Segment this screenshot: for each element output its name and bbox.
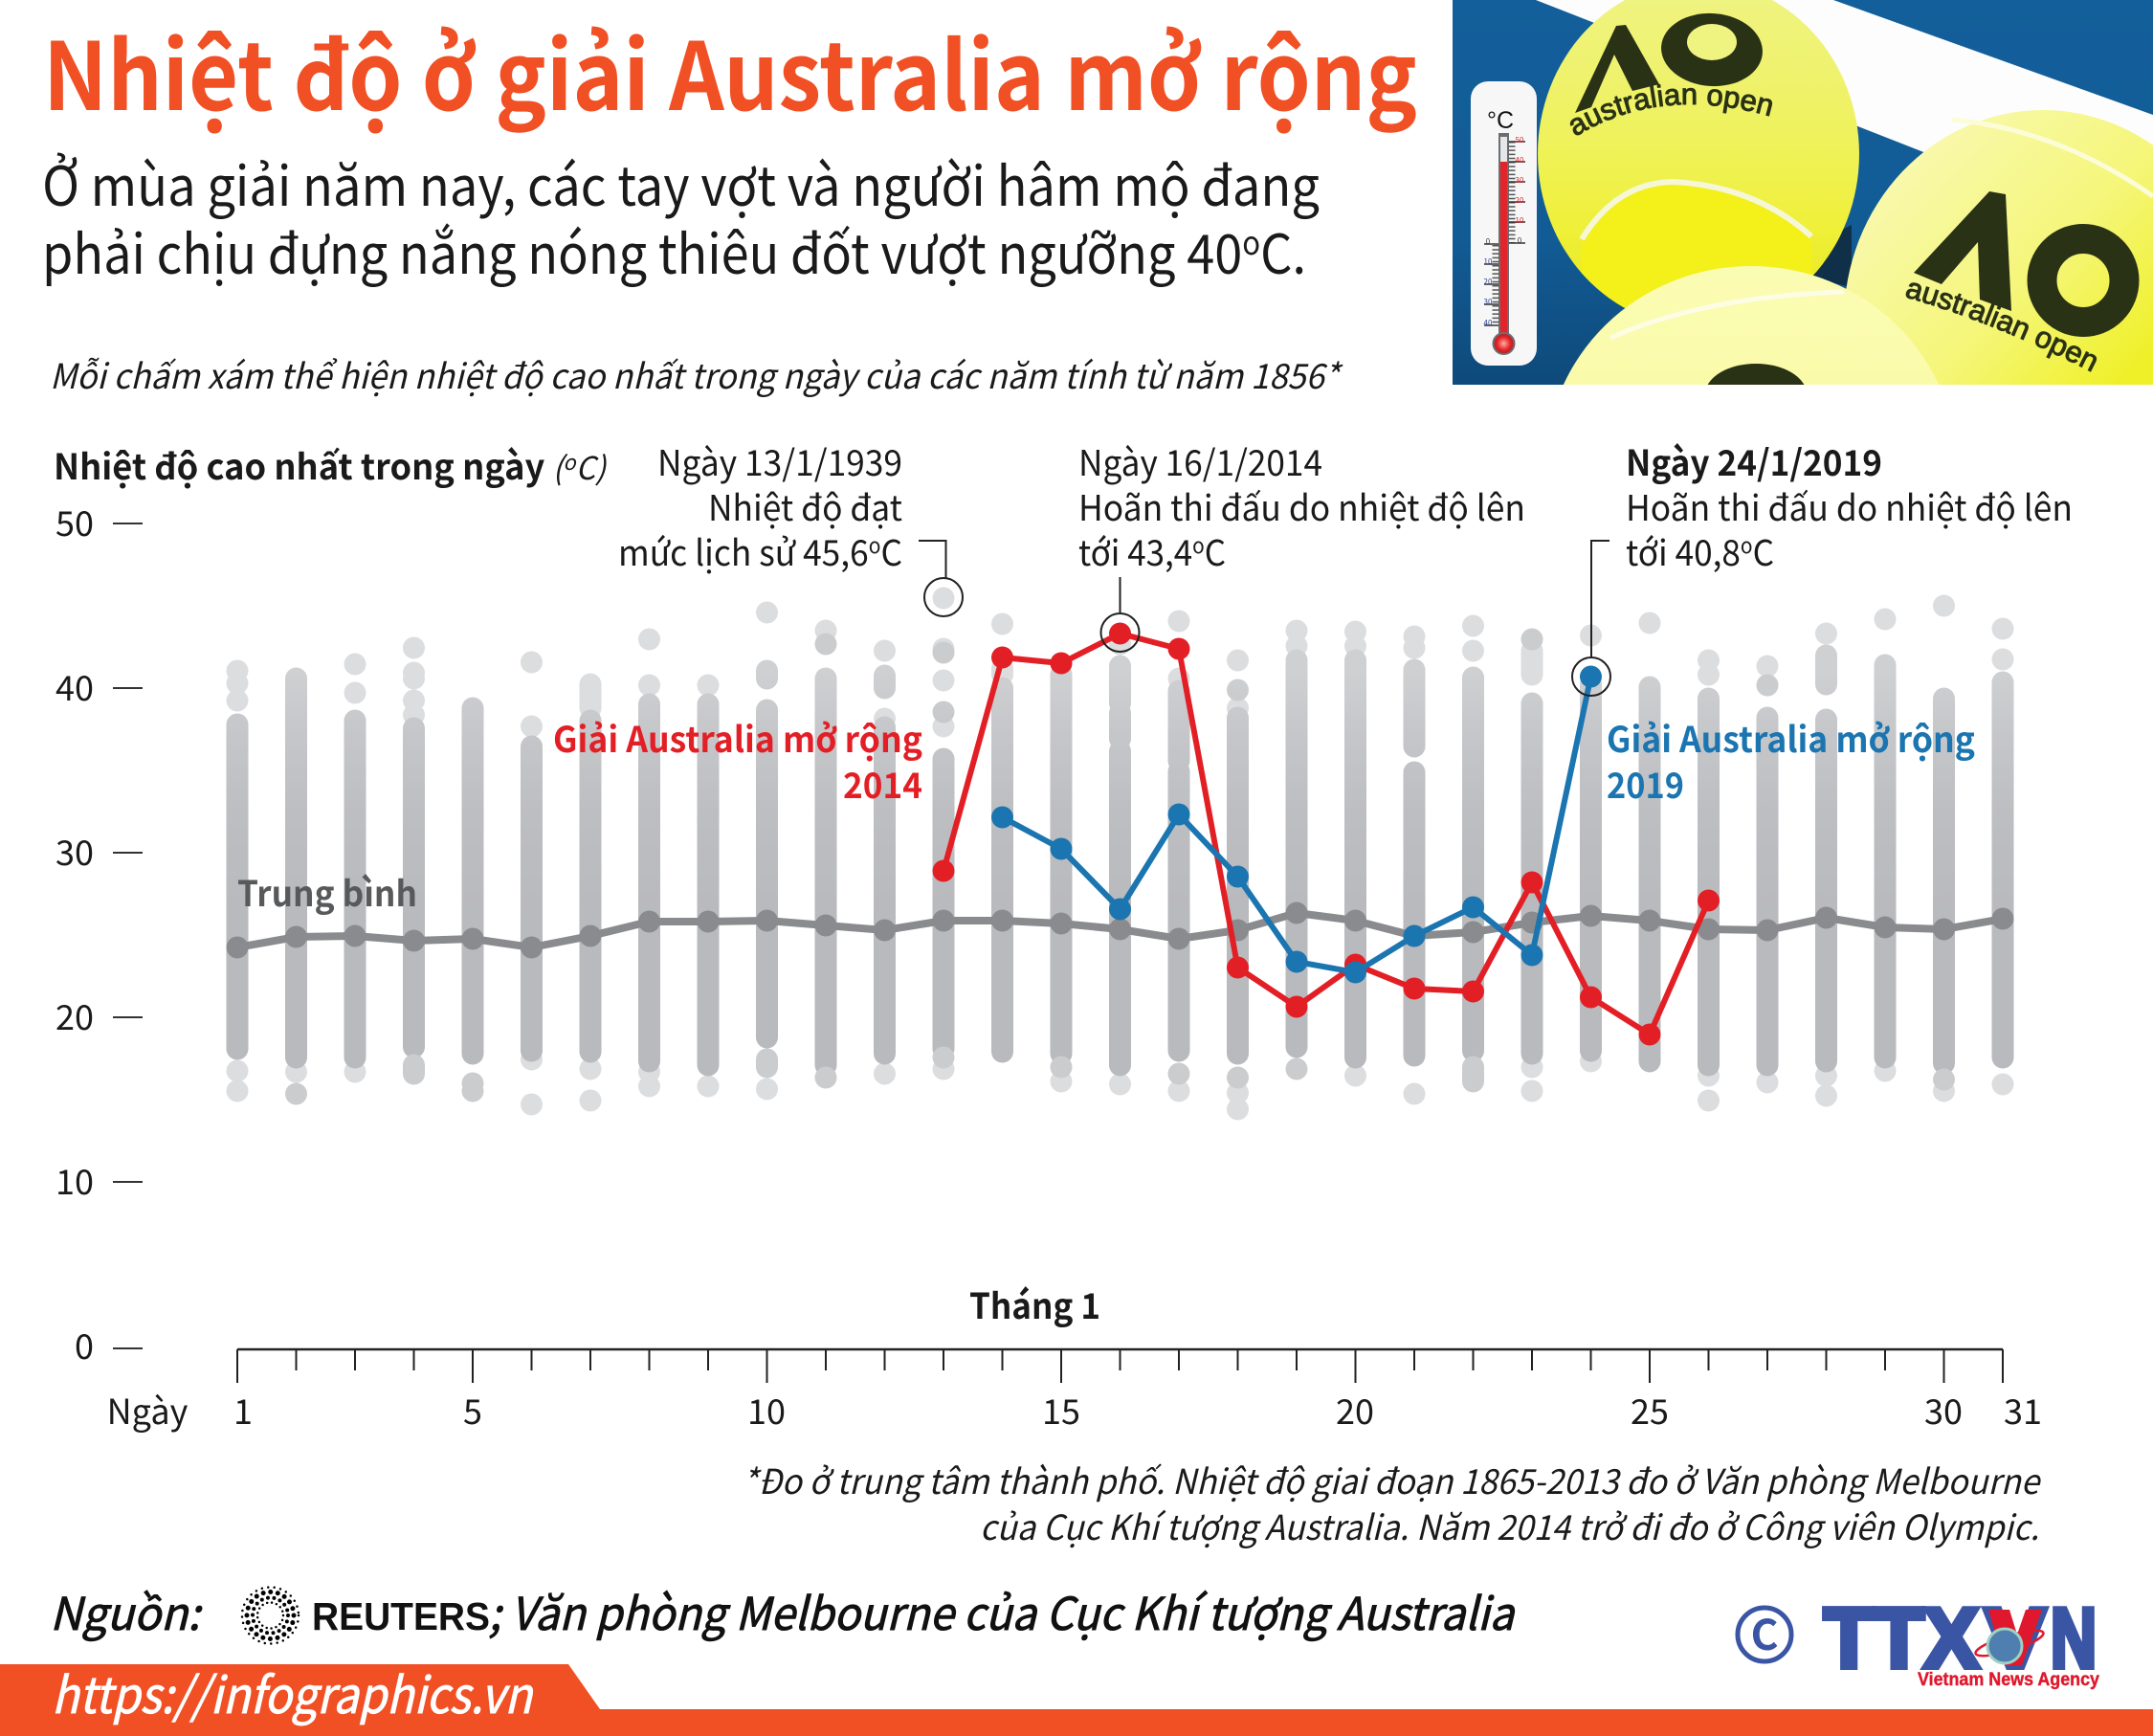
callout: 24/1/2019: tới 40,8 — [1626, 524, 1746, 576]
callout: 16/1/2014: o — [1192, 529, 1205, 560]
source line — [50, 1577, 1516, 1644]
callout: 16/1/2014 — [1078, 434, 1525, 652]
callout: 13/1/1939: mức lịch sử 45,6 — [618, 524, 880, 576]
callout: 16/1/2014: Hoãn thi đấu do nhiệt độ lên — [1078, 479, 1525, 531]
y axis labels and ticks: 10 — [55, 1155, 94, 1205]
icon: thermometer: 50 — [1516, 135, 1524, 145]
y axis labels and ticks: 30 — [55, 826, 94, 876]
y axis labels and ticks: 50 — [55, 497, 94, 546]
icon: thermometer: 10 — [1484, 256, 1493, 267]
logo on ball 2 — [1906, 191, 2140, 372]
copyright mark: C — [1751, 1601, 1778, 1662]
TTXVN logo: Vietnam News Agency — [1918, 1670, 2099, 1690]
website url: https://infographics.vn — [52, 1656, 534, 1727]
callout: 24/1/2019: Hoãn thi đấu do nhiệt độ lên — [1626, 479, 2073, 531]
x axis: Ngày — [107, 1385, 189, 1435]
x axis: 15 — [1042, 1385, 1080, 1435]
note: meaning of grey dots: Mỗi chấm xám thể hiện nhiệt độ cao nhất trong ngày của các năm tính từ năm 1856* — [50, 349, 1343, 399]
icon: thermometer: 30 — [1484, 297, 1493, 307]
x axis: 25 — [1631, 1385, 1669, 1435]
x axis — [107, 1349, 2042, 1435]
TTXVN logo — [1824, 1591, 2099, 1690]
label: 2019 series: 2019 — [1607, 757, 1684, 809]
footnote: *Đo ở trung tâm thành phố. Nhiệt độ giai đoạn 1865-2013 đo ở Văn phòng Melbourne — [743, 1455, 2042, 1504]
average line — [237, 913, 2003, 947]
icon: thermometer: 20 — [1516, 195, 1524, 206]
label: 2019 series — [1607, 711, 1975, 809]
icon: thermometer: 40 — [1484, 318, 1493, 328]
TTXVN logo: TTX — [1824, 1591, 1979, 1685]
x axis: 1 — [233, 1385, 253, 1435]
icon: thermometer: 30 — [1516, 175, 1524, 186]
callout: 16/1/2014: Ngày 16/1/2014 — [1078, 434, 1322, 486]
logo on ball 1 — [1569, 13, 1772, 136]
logo on ball 1: australian open — [1569, 84, 1772, 136]
icon: thermometer: °C — [1487, 107, 1514, 134]
icon: thermometer: 10 — [1516, 215, 1524, 226]
red line: 2014 tournament — [943, 634, 1709, 1035]
subtitle: C. — [1260, 211, 1306, 290]
callout: 13/1/1939: o — [869, 529, 880, 560]
dot columns: daily highs since 1856 — [237, 598, 2003, 1109]
TTXVN logo: N — [2051, 1591, 2097, 1685]
source line: REUTERS — [312, 1594, 490, 1638]
icon: thermometer: 40 — [1516, 155, 1524, 166]
callout: 13/1/1939: Nhiệt độ đạt — [708, 479, 902, 531]
logo on ball 2: australian open — [1906, 282, 2098, 372]
subtitle: Ở mùa giải năm nay, các tay vợt và người hâm mộ đang — [42, 144, 1320, 222]
callout: 16/1/2014: C — [1205, 524, 1226, 576]
footnote: của Cục Khí tượng Australia. Năm 2014 trở đi đo ở Công viên Olympic. — [980, 1501, 2039, 1550]
callout: 24/1/2019: C — [1753, 524, 1774, 576]
callout: 13/1/1939: C — [880, 524, 902, 576]
blue line: 2019 tournament — [1003, 677, 1590, 972]
label: 2014 series: 2014 — [843, 757, 922, 809]
icon: thermometer: 0 — [1486, 236, 1491, 247]
x axis: 20 — [1336, 1385, 1374, 1435]
y axis labels and ticks: 0 — [75, 1320, 94, 1369]
callout: 13/1/1939: Ngày 13/1/1939 — [657, 434, 902, 486]
photo: Australian Open tennis balls with thermometer — [1453, 0, 2153, 385]
y axis labels and ticks: 20 — [55, 990, 94, 1040]
label: 2019 series: Giải Australia mở rộng — [1607, 711, 1975, 763]
label: 2014 series: Giải Australia mở rộng — [553, 711, 922, 763]
TTXVN logo: V — [1985, 1591, 2046, 1685]
subtitle: phải chịu đựng nắng nóng thiêu đốt vượt ngưỡng 40 — [42, 211, 1351, 290]
title: Nhiệt độ ở giải Australia mở rộng — [43, 2, 1417, 138]
icon: thermometer: 0 — [1518, 235, 1522, 246]
callout: 24/1/2019: Ngày 24/1/2019 — [1626, 434, 1882, 486]
source line: Nguồn: — [50, 1577, 203, 1643]
x axis: 5 — [463, 1385, 482, 1435]
label: 2014 series — [553, 711, 922, 809]
callout: 24/1/2019: o — [1741, 529, 1753, 560]
copyright mark — [1738, 1601, 1791, 1662]
icon: thermometer — [1471, 81, 1537, 366]
x axis: 31 — [2004, 1385, 2042, 1435]
subtitle: o — [1242, 217, 1260, 264]
x axis month label: Tháng 1 — [969, 1278, 1100, 1329]
x axis: 30 — [1924, 1385, 1963, 1435]
footnote — [743, 1455, 2042, 1550]
callout: 24/1/2019 — [1572, 434, 2073, 696]
y axis title: Nhiệt độ cao nhất trong ngày ( — [54, 438, 564, 490]
icon: thermometer: 20 — [1484, 277, 1493, 287]
y axis title: C) — [575, 443, 608, 489]
x axis: 10 — [747, 1385, 786, 1435]
footer band — [0, 1664, 2153, 1736]
callout: 16/1/2014: tới 43,4 — [1078, 524, 1199, 576]
y axis title: o — [563, 446, 577, 477]
subtitle — [42, 144, 1320, 290]
y axis labels and ticks — [55, 497, 143, 1369]
icon: Reuters dot logo — [242, 1587, 299, 1644]
y axis labels and ticks: 40 — [55, 661, 94, 711]
callout: 13/1/1939 — [618, 434, 963, 616]
label: average: Trung bình — [237, 865, 417, 917]
source line: ; Văn phòng Melbourne của Cục Khí tượng Australia — [489, 1577, 1516, 1643]
